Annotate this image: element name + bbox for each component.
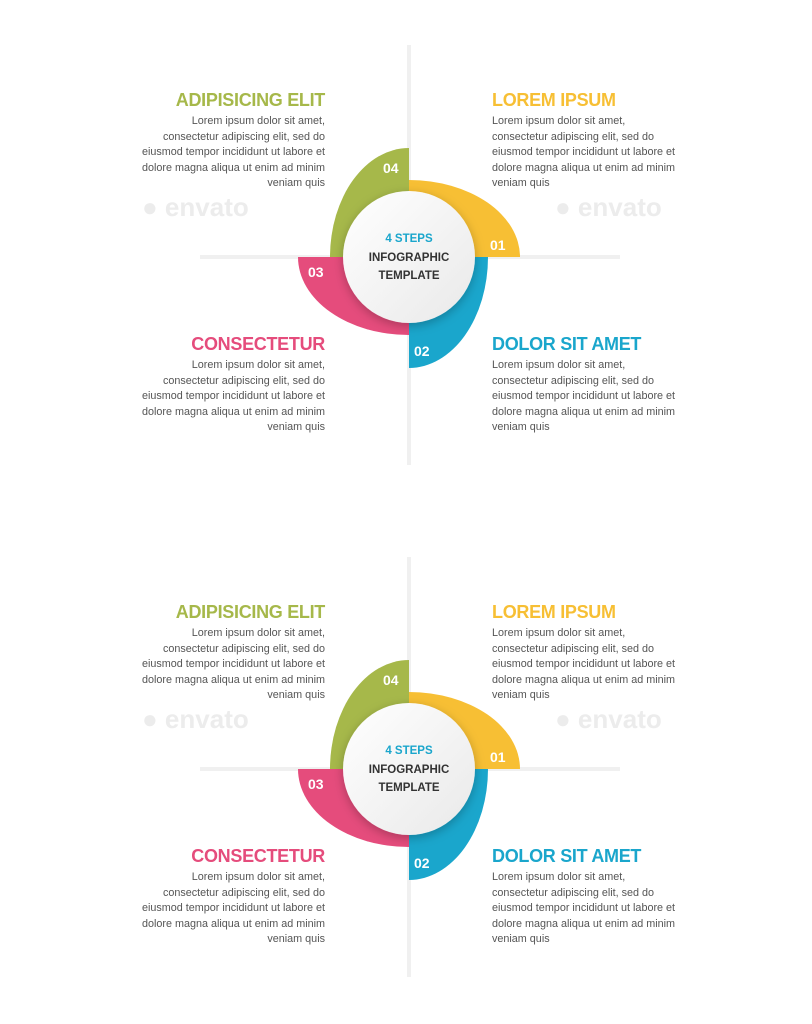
segment 04 green <box>330 660 409 769</box>
text: consectetur: dolore magna aliqua ut enim ad minim <box>142 918 325 930</box>
text: adipisicing <box>142 627 325 701</box>
segment 02 blue: 02 <box>414 855 430 871</box>
block 2 <box>142 557 675 977</box>
text: dolor: veniam quis <box>492 933 550 945</box>
segment 01 yellow <box>409 692 520 769</box>
segment 01 yellow: 01 <box>490 237 506 253</box>
text: consectetur: veniam quis <box>267 933 325 945</box>
text: adipisicing: consectetur adipiscing elit, sed do <box>163 642 325 654</box>
text: adipisicing: consectetur adipiscing elit, sed do <box>163 130 325 142</box>
heading: dolor: DOLOR SIT AMET <box>492 846 641 866</box>
text: consectetur <box>142 871 325 945</box>
segment 04 green: 04 <box>383 672 399 688</box>
segment 03 pink: 03 <box>308 264 324 280</box>
text: consectetur: consectetur adipiscing elit, sed do <box>163 374 325 386</box>
segment 02 blue: 02 <box>414 343 430 359</box>
diagram <box>200 45 620 465</box>
segment 03 pink <box>298 769 409 847</box>
heading: adipisicing: ADIPISICING ELIT <box>176 90 325 110</box>
text: dolor: dolore magna aliqua ut enim ad minim <box>492 918 675 930</box>
segment 02 blue <box>409 769 488 880</box>
text: dolor <box>492 359 675 433</box>
text: lorem <box>492 627 675 701</box>
text: adipisicing: eiusmod tempor incididunt ut labore et <box>142 658 325 670</box>
text: adipisicing: Lorem ipsum dolor sit amet, <box>192 115 325 127</box>
text: consectetur: eiusmod tempor incididunt ut labore et <box>142 390 325 402</box>
text: lorem <box>492 115 675 189</box>
segment 03 pink: 03 <box>308 776 324 792</box>
heading: consectetur: CONSECTETUR <box>191 846 325 866</box>
text: adipisicing: dolore magna aliqua ut enim ad minim <box>142 674 325 686</box>
center circle <box>343 191 475 323</box>
heading: lorem: LOREM IPSUM <box>492 602 616 622</box>
text: consectetur: Lorem ipsum dolor sit amet, <box>192 359 325 371</box>
text: consectetur: veniam quis <box>267 421 325 433</box>
text: dolor: Lorem ipsum dolor sit amet, <box>492 871 625 883</box>
text: adipisicing: veniam quis <box>267 689 325 701</box>
text: adipisicing: dolore magna aliqua ut enim ad minim <box>142 162 325 174</box>
center circle: INFOGRAPHIC <box>369 764 449 776</box>
segment 01 yellow <box>409 180 520 257</box>
text: lorem: eiusmod tempor incididunt ut labore et <box>492 658 675 670</box>
segment 04 green: 04 <box>383 160 399 176</box>
text: adipisicing: veniam quis <box>267 177 325 189</box>
segment 02 blue <box>409 257 488 368</box>
segment 03 pink <box>298 257 409 335</box>
watermark left: ● envato <box>142 192 249 222</box>
text: adipisicing <box>142 115 325 189</box>
text: consectetur: Lorem ipsum dolor sit amet, <box>192 871 325 883</box>
watermark left: ● envato <box>142 704 249 734</box>
text: consectetur: consectetur adipiscing elit, sed do <box>163 886 325 898</box>
segment 04 green <box>330 148 409 257</box>
text: dolor <box>492 871 675 945</box>
text: dolor: dolore magna aliqua ut enim ad minim <box>492 406 675 418</box>
heading: dolor: DOLOR SIT AMET <box>492 334 641 354</box>
text: dolor: eiusmod tempor incididunt ut labore et <box>492 390 675 402</box>
text: lorem: Lorem ipsum dolor sit amet, <box>492 627 625 639</box>
text: dolor: consectetur adipiscing elit, sed do <box>492 886 654 898</box>
text: dolor: eiusmod tempor incididunt ut labore et <box>492 902 675 914</box>
text: lorem: eiusmod tempor incididunt ut labore et <box>492 146 675 158</box>
text: consectetur: dolore magna aliqua ut enim ad minim <box>142 406 325 418</box>
text: lorem: dolore magna aliqua ut enim ad minim <box>492 674 675 686</box>
text: consectetur: eiusmod tempor incididunt ut labore et <box>142 902 325 914</box>
text: lorem: dolore magna aliqua ut enim ad minim <box>492 162 675 174</box>
text: dolor: Lorem ipsum dolor sit amet, <box>492 359 625 371</box>
text: adipisicing: eiusmod tempor incididunt ut labore et <box>142 146 325 158</box>
text: consectetur <box>142 359 325 433</box>
center circle: INFOGRAPHIC <box>369 252 449 264</box>
heading: adipisicing: ADIPISICING ELIT <box>176 602 325 622</box>
text: adipisicing: Lorem ipsum dolor sit amet, <box>192 627 325 639</box>
text: lorem: veniam quis <box>492 689 550 701</box>
center circle: TEMPLATE <box>378 782 440 794</box>
text: dolor: veniam quis <box>492 421 550 433</box>
heading: lorem: LOREM IPSUM <box>492 90 616 110</box>
diagram <box>200 557 620 977</box>
text: dolor: consectetur adipiscing elit, sed do <box>492 374 654 386</box>
watermark right: ● envato <box>555 704 662 734</box>
text: lorem: consectetur adipiscing elit, sed do <box>492 130 654 142</box>
center circle <box>343 703 475 835</box>
block 1 <box>142 45 675 465</box>
segment 01 yellow: 01 <box>490 749 506 765</box>
center circle: 4 STEPS <box>385 233 433 245</box>
center circle: TEMPLATE <box>378 270 440 282</box>
heading: consectetur: CONSECTETUR <box>191 334 325 354</box>
text: lorem: Lorem ipsum dolor sit amet, <box>492 115 625 127</box>
text: lorem: consectetur adipiscing elit, sed do <box>492 642 654 654</box>
watermark right: ● envato <box>555 192 662 222</box>
center circle: 4 STEPS <box>385 745 433 757</box>
text: lorem: veniam quis <box>492 177 550 189</box>
